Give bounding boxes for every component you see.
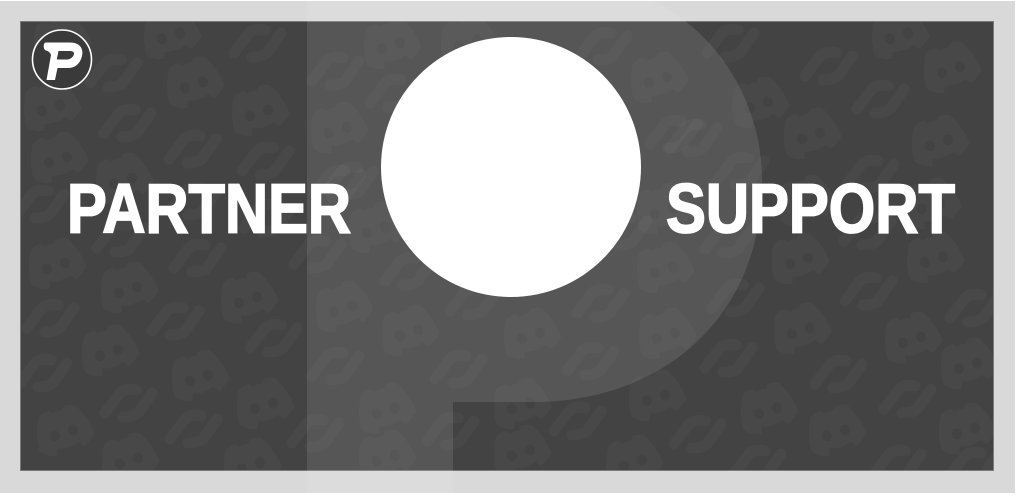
large translucent P watermark <box>307 1 762 493</box>
white centre circle <box>381 37 641 297</box>
heading: SUPPORT: SUPPORT <box>666 170 955 248</box>
heading: PARTNER: PARTNER <box>67 170 351 248</box>
icon: P logo badge <box>32 30 92 89</box>
repeating discord and phone icon pattern <box>326 37 702 297</box>
